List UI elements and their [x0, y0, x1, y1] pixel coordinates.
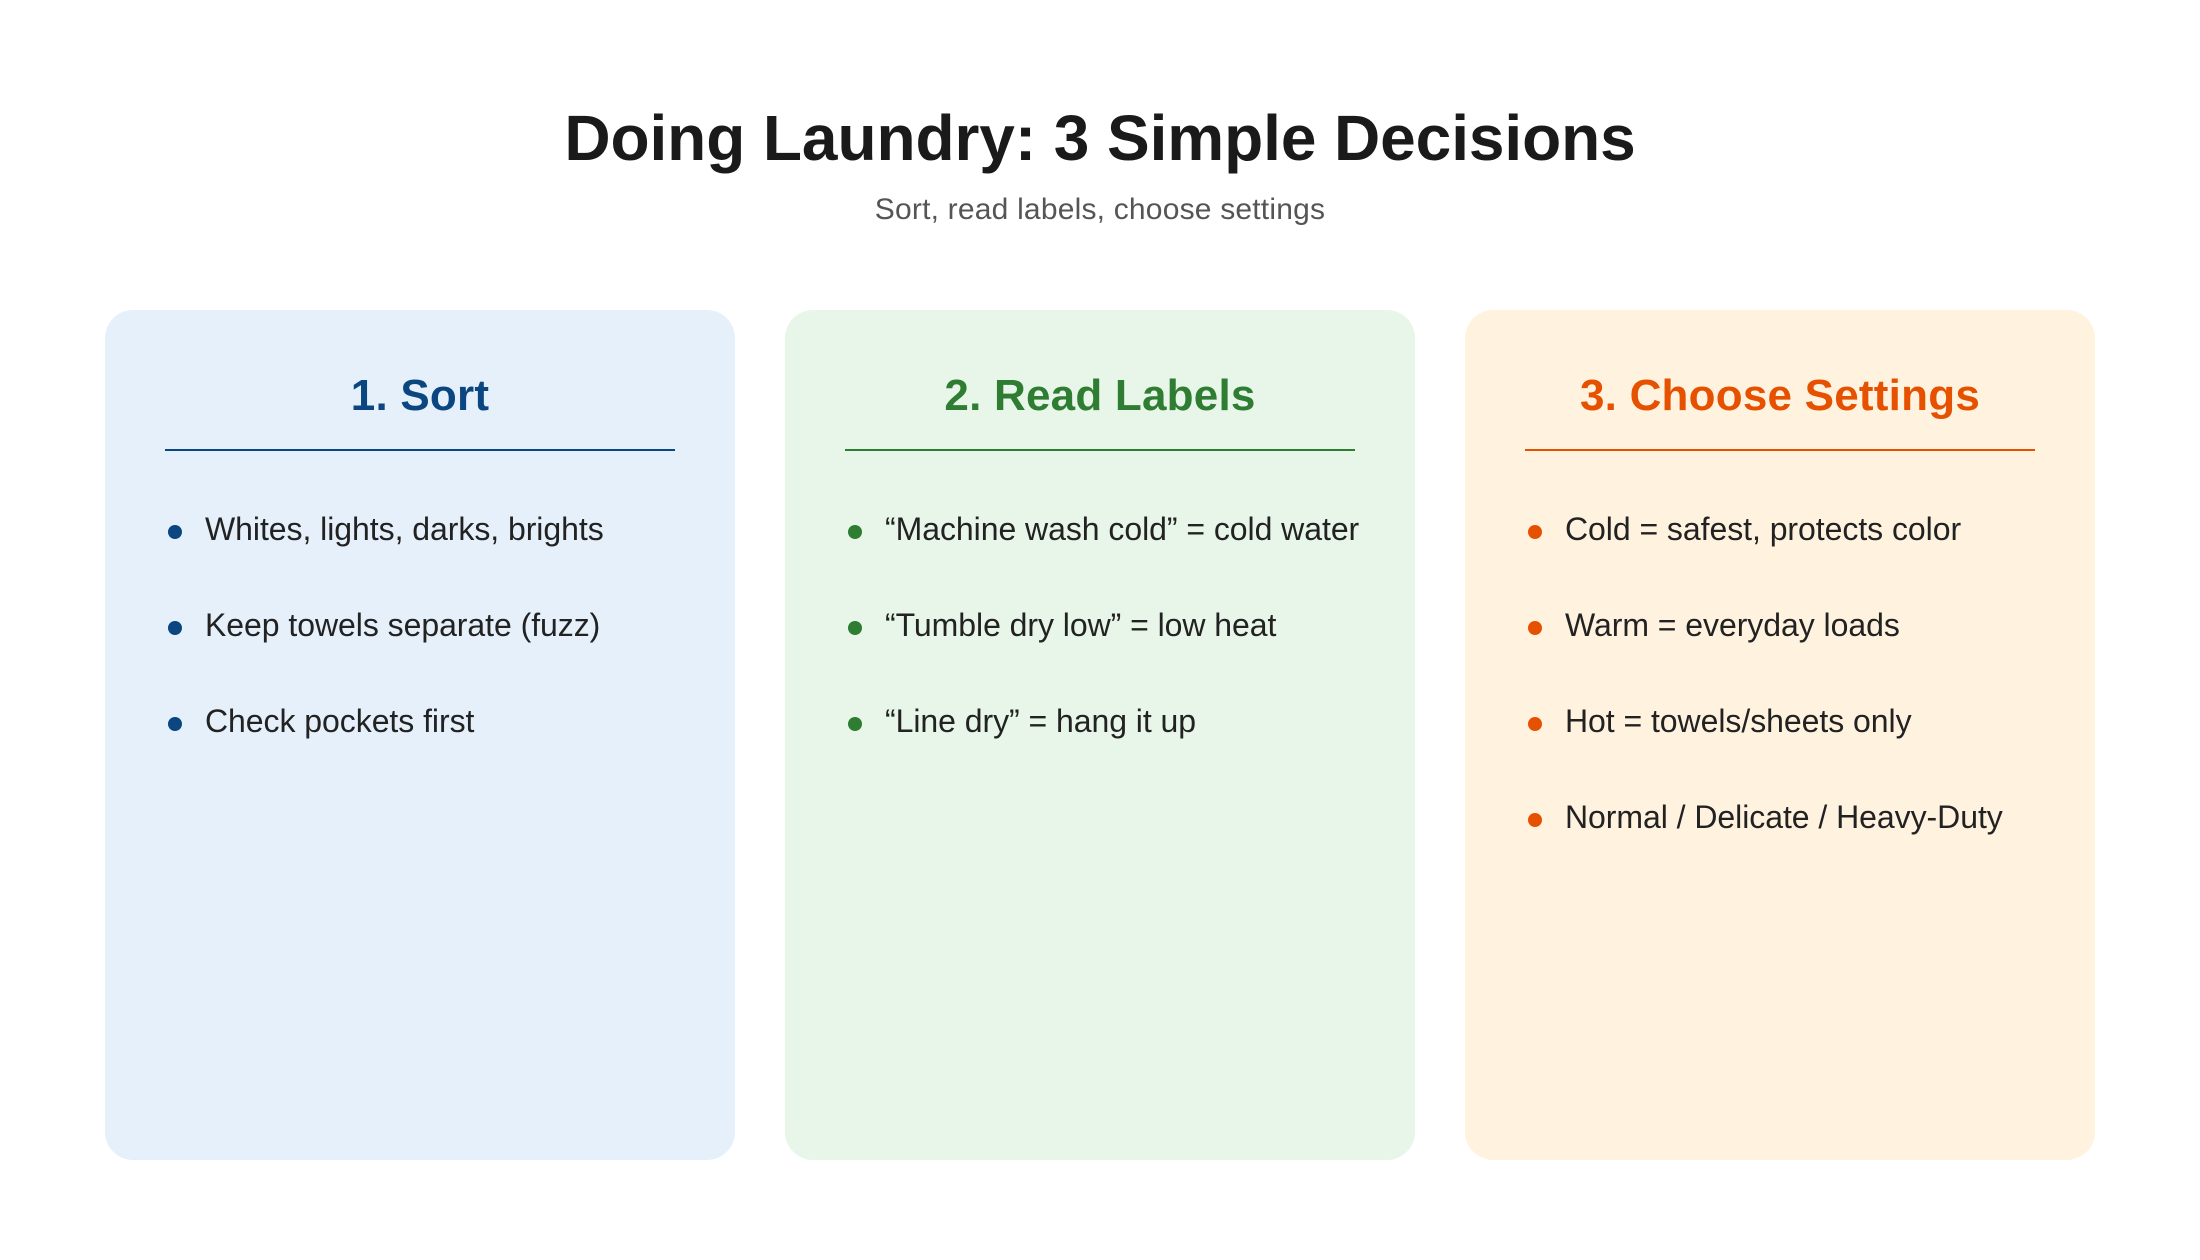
panel: 1. Sort — [105, 310, 735, 1160]
heading: 3. Choose Settings: 3. Choose Settings — [1580, 371, 1980, 420]
heading: 1. Sort: 1. Sort — [351, 371, 489, 420]
panel background: labels — [785, 310, 1415, 1160]
panel background: sort — [105, 310, 735, 1160]
list item: machine wash cold: “Machine wash cold” = cold water — [885, 511, 1360, 547]
list item: pockets: Check pockets first — [205, 703, 475, 739]
list item: warm: Warm = everyday loads — [1565, 607, 1900, 643]
list item: cycles: Normal / Delicate / Heavy-Duty — [1565, 799, 2003, 835]
subtitle: Sort, read labels, choose settings — [875, 193, 1325, 226]
panel background: settings — [1465, 310, 2095, 1160]
list item: cold: Cold = safest, protects color — [1565, 511, 1961, 547]
heading: 2. Read Labels: 2. Read Labels — [944, 371, 1256, 420]
list item: line dry: “Line dry” = hang it up — [885, 703, 1196, 739]
panel: 2. Read Labels — [785, 310, 1415, 1160]
list item: whites: Whites, lights, darks, brights — [205, 511, 604, 547]
list item: tumble dry low: “Tumble dry low” = low heat — [885, 607, 1277, 643]
list item: hot: Hot = towels/sheets only — [1565, 703, 1912, 739]
panel: 3. Choose Settings — [1465, 310, 2095, 1160]
list item: towels: Keep towels separate (fuzz) — [205, 607, 600, 643]
title: Doing Laundry: 3 Simple Decisions — [564, 102, 1636, 174]
